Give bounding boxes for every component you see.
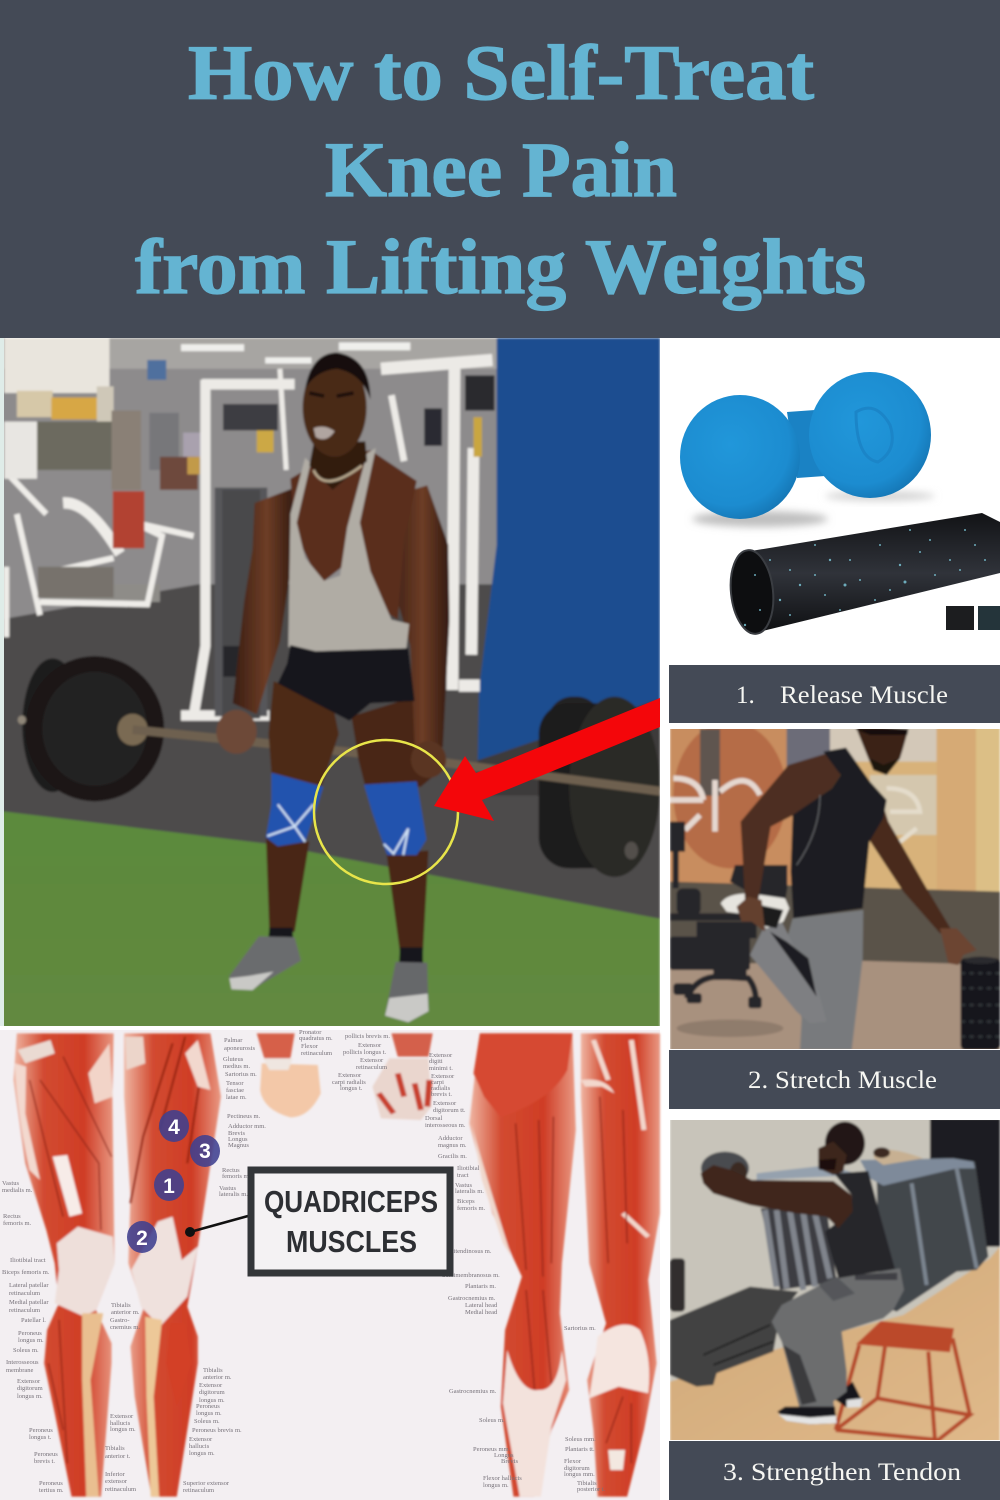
chest — [290, 450, 417, 620]
anatomical labels: interosseous m. — [425, 1122, 466, 1129]
numbered marker 3: 3 — [199, 1140, 211, 1163]
anatomical labels: brevis t. — [34, 1458, 55, 1465]
floor mat — [670, 1287, 798, 1387]
shorts — [278, 645, 415, 721]
anatomical labels: retinaculum — [105, 1486, 136, 1493]
icon: blue peanut massage ball — [680, 372, 935, 527]
anatomical labels: longus m. — [189, 1450, 215, 1457]
anatomical labels: tract — [457, 1172, 469, 1179]
anatomical labels: anterior m. — [111, 1309, 140, 1316]
callout: quadriceps muscles: MUSCLES — [286, 1224, 417, 1259]
shins — [266, 837, 309, 932]
anatomical labels: Lateral patellar — [9, 1282, 49, 1289]
anatomical labels: hallucis — [189, 1443, 210, 1450]
anatomical labels: Iliotibial — [457, 1165, 480, 1172]
numbered marker 4 — [159, 1110, 189, 1142]
anatomical labels: Biceps — [457, 1198, 475, 1205]
anatomical labels: cnemius m. — [110, 1324, 140, 1331]
left gym equipment — [6, 474, 194, 637]
anatomical labels: carpi — [431, 1079, 444, 1086]
anatomical labels: Gastro- — [110, 1317, 130, 1324]
anatomical labels: Plantaris tt. — [565, 1446, 595, 1453]
back leg left — [469, 1033, 576, 1497]
anatomical labels: digiti — [429, 1058, 443, 1065]
anatomical labels: Adductor mm. — [228, 1123, 266, 1130]
numbered marker 3 — [190, 1135, 220, 1167]
anatomical labels: Brevis — [501, 1458, 518, 1465]
anatomical labels: retinaculum — [183, 1487, 214, 1494]
arm — [701, 1165, 853, 1228]
anatomical labels: Medial patellar — [9, 1299, 49, 1306]
callout: quadriceps muscles — [251, 1170, 450, 1273]
anatomical labels: Tibialis — [203, 1367, 223, 1374]
anatomical labels: Lateral head — [465, 1302, 498, 1309]
title — [135, 29, 866, 310]
front leg with numbered muscles — [124, 1033, 221, 1497]
pants — [772, 1268, 904, 1410]
socks — [268, 928, 293, 945]
anatomical labels: Peroneus mm. — [473, 1446, 511, 1453]
anatomical labels: Magnus — [228, 1142, 249, 1149]
anatomical labels: Rectus — [3, 1213, 21, 1220]
far shoe — [833, 1382, 863, 1408]
anatomical labels: hallucis — [110, 1420, 131, 1427]
anatomical labels: longus m. — [17, 1393, 43, 1400]
grey tank top — [288, 448, 409, 652]
anatomical labels: Tibialis — [577, 1480, 597, 1487]
foam roller — [961, 957, 1000, 1050]
anatomical labels: lateralis m. — [219, 1191, 248, 1198]
anatomical labels: Extensor — [110, 1413, 134, 1420]
anatomical labels: Pronator — [299, 1029, 322, 1036]
label: strengthen tendon — [669, 1441, 1000, 1500]
anatomical labels: Rectus — [222, 1167, 240, 1174]
bent leg — [750, 922, 827, 1023]
label: release muscle: Release Muscle — [780, 682, 948, 709]
barbell — [133, 730, 660, 791]
anatomical labels — [2, 1029, 606, 1494]
left edge strip — [0, 338, 4, 1026]
weight stack frame — [181, 360, 492, 716]
panel: anatomy chart of leg muscles — [0, 1029, 660, 1500]
turf — [0, 811, 660, 1028]
anatomical labels: Pectineus m. — [227, 1113, 261, 1120]
numbered marker 1 — [154, 1169, 184, 1201]
anatomical labels: Plantaris m. — [465, 1283, 496, 1290]
hand — [737, 897, 765, 932]
head — [855, 725, 908, 775]
photo: box squat with medicine ball — [670, 1115, 1000, 1445]
label: stretch muscle: 2. Stretch Muscle — [748, 1067, 937, 1094]
floor — [0, 584, 660, 919]
anatomical labels: Flexor hallucis — [483, 1475, 522, 1482]
anatomical labels: Peroneus — [34, 1451, 58, 1458]
anatomical labels: retinaculum — [9, 1290, 40, 1297]
anatomical labels: posterior t. — [577, 1486, 606, 1493]
anatomical labels: Tensor — [226, 1080, 244, 1087]
label: release muscle — [669, 665, 1000, 723]
thighs — [269, 681, 339, 791]
anatomical labels: Palmar — [224, 1037, 243, 1044]
anatomical labels: longus m. — [483, 1482, 509, 1489]
anatomical labels: Gastrocnemius m. — [449, 1388, 497, 1395]
anatomical labels: Peroneus — [18, 1330, 42, 1337]
anatomical labels: Soleus m. — [479, 1417, 505, 1424]
callout: quadriceps muscles: QUADRICEPS — [264, 1184, 438, 1219]
man squatting — [701, 1122, 904, 1424]
anatomical labels: tertius m. — [39, 1487, 64, 1494]
neck — [309, 441, 367, 490]
shoes — [229, 936, 301, 989]
anatomical labels: digitorum — [17, 1385, 43, 1392]
anatomical labels: longus m. — [196, 1410, 222, 1417]
numbered marker 1: 1 — [163, 1175, 175, 1198]
anatomical labels: Sartorius m. — [225, 1071, 257, 1078]
anatomical labels: Tibialis — [111, 1302, 131, 1309]
label: release muscle: 1. — [736, 682, 755, 709]
anatomical labels: retinaculum — [301, 1050, 332, 1057]
anatomical labels: Inferior — [105, 1471, 126, 1478]
anatomical labels: Peroneus brevis m. — [192, 1427, 242, 1434]
numbered marker 2 — [127, 1221, 157, 1253]
title: from Lifting Weights — [135, 223, 866, 310]
tank top — [825, 1171, 895, 1278]
anatomical labels: Extensor — [189, 1436, 213, 1443]
front arm — [869, 795, 952, 933]
anatomical labels: quadratus m. — [299, 1035, 333, 1042]
anatomical labels: longus m. — [199, 1397, 225, 1404]
anatomical labels: brevis t. — [431, 1091, 452, 1098]
callout pointer — [185, 1216, 248, 1237]
anatomical labels: Patellar l. — [21, 1317, 46, 1324]
anatomical labels: magnus m. — [438, 1142, 467, 1149]
anatomical labels: Extensor — [431, 1073, 455, 1080]
fist — [257, 1033, 321, 1117]
anatomical labels: longus mm. — [564, 1471, 595, 1478]
head — [825, 1122, 865, 1165]
head — [303, 358, 367, 457]
title: Knee Pain — [325, 126, 677, 213]
anatomical labels: Semimembranosus m. — [442, 1272, 500, 1279]
title: How to Self-Treat — [188, 29, 814, 116]
header panel — [0, 0, 1000, 338]
anatomical labels: pollicis brevis m. — [345, 1033, 390, 1040]
anatomical labels: Vastus — [2, 1180, 19, 1187]
anatomical labels: digitorum tt. — [433, 1107, 466, 1114]
anatomical labels: pollicis longus t. — [343, 1049, 387, 1056]
anatomical labels: Peroneus — [29, 1427, 53, 1434]
shoe — [721, 893, 789, 928]
anatomical labels: digitorum — [199, 1389, 225, 1396]
anatomical labels: femoris m. — [457, 1205, 486, 1212]
anatomical labels: Interosseous — [6, 1359, 39, 1366]
anatomical labels: medialis m. — [2, 1187, 33, 1194]
anatomical labels: Superior extensor — [183, 1480, 230, 1487]
anatomical labels: retinaculum — [356, 1064, 387, 1071]
anatomical labels: Flexor — [301, 1043, 319, 1050]
black tank top — [791, 748, 887, 918]
anatomical labels: Flexor — [564, 1458, 582, 1465]
anatomical labels: carpi radialis — [332, 1079, 366, 1086]
anatomical labels: Vastus — [455, 1182, 472, 1189]
red arrow — [434, 698, 660, 821]
anatomical labels: Tibialis — [105, 1445, 125, 1452]
anatomical labels: Medial head — [465, 1309, 498, 1316]
anatomical labels: Peroneus — [196, 1403, 220, 1410]
anatomical labels: Longus — [494, 1452, 514, 1459]
icon: black foam roller — [727, 513, 1000, 636]
back leg right — [581, 1033, 660, 1497]
standing leg — [783, 910, 863, 1050]
icon: roller colour swatches — [946, 606, 1000, 630]
anatomical labels: Extensor — [17, 1378, 41, 1385]
yellow circle highlight — [314, 740, 458, 884]
anatomical labels: femoris m. — [3, 1220, 32, 1227]
bench equipment — [670, 822, 787, 1008]
anatomical labels: Gracilis m. — [438, 1153, 467, 1160]
numbered marker 2: 2 — [136, 1227, 148, 1250]
medicine ball — [701, 1152, 749, 1185]
anatomical labels: Semitendinosus m. — [442, 1248, 492, 1255]
near shoe — [777, 1407, 837, 1424]
anatomical labels: Extensor — [338, 1072, 362, 1079]
man stretching — [721, 725, 977, 1050]
anatomical labels: latae m. — [226, 1094, 247, 1101]
anatomical labels: Gluteus — [223, 1056, 244, 1063]
anatomical labels: Gastrocnemius m. — [448, 1295, 496, 1302]
anatomical labels: aponeurosis — [224, 1045, 256, 1052]
anatomical labels: longus t. — [29, 1434, 52, 1441]
grey pad stack — [877, 1160, 988, 1312]
anatomical labels: Extensor — [433, 1100, 457, 1107]
lifter — [216, 353, 450, 1022]
label: stretch muscle — [669, 1050, 1000, 1109]
anatomical labels: femoris m. — [222, 1173, 251, 1180]
anatomical labels: Iliotibial tract — [10, 1257, 46, 1264]
anatomical labels: medius m. — [223, 1063, 250, 1070]
panel: release muscle tools — [664, 338, 1000, 665]
anatomical labels: Dorsal — [425, 1115, 443, 1122]
anatomical labels: longus m. — [18, 1337, 44, 1344]
anatomical labels: Vastus — [219, 1185, 236, 1192]
photo: deadlift with knee pain highlighted — [0, 338, 660, 1028]
anatomical labels: digitorum — [564, 1465, 590, 1472]
anatomical labels: Peroneus — [39, 1480, 63, 1487]
floor — [670, 882, 1000, 965]
anatomical labels: minimi t. — [429, 1065, 453, 1072]
anatomical labels: Soleus m. — [194, 1418, 220, 1425]
anatomical labels: longus m. — [110, 1426, 136, 1433]
anatomical labels: lateralis m. — [455, 1188, 484, 1195]
anatomical labels: Sartorius m. — [564, 1325, 596, 1332]
anatomical labels: Soleus mm. — [565, 1436, 596, 1443]
anatomical labels: Adductor — [438, 1135, 463, 1142]
anatomical labels: retinaculum — [9, 1307, 40, 1314]
anatomical labels: Extensor — [358, 1042, 382, 1049]
label: strengthen tendon: 3. Strengthen Tendon — [723, 1459, 962, 1486]
hand muscles — [372, 1033, 433, 1120]
anatomical labels: anterior t. — [105, 1453, 131, 1460]
photo: quad stretch — [670, 722, 1000, 1055]
blue wall — [478, 338, 660, 760]
anatomical labels: membrane — [6, 1367, 34, 1374]
front leg left — [13, 1033, 114, 1497]
anatomical labels: Biceps femoris m. — [2, 1269, 50, 1276]
anatomical labels: radialis — [431, 1085, 451, 1092]
anatomical labels: Brevis — [228, 1130, 245, 1137]
anatomical labels: Extensor — [429, 1052, 453, 1059]
red plyo box — [836, 1338, 970, 1440]
knee sleeves — [266, 773, 323, 846]
mural letters — [670, 778, 760, 832]
numbered marker 4: 4 — [168, 1116, 180, 1139]
right weight plates — [539, 697, 660, 877]
back arm — [741, 753, 841, 900]
left weight plates — [18, 656, 164, 801]
anatomical labels: Extensor — [199, 1382, 223, 1389]
dumbbells — [670, 1258, 685, 1312]
anatomical labels: Longus — [228, 1136, 248, 1143]
anatomical labels: fasciae — [226, 1087, 244, 1094]
anatomical labels: Extensor — [360, 1057, 384, 1064]
anatomical labels: anterior m. — [203, 1374, 232, 1381]
arms — [233, 488, 295, 714]
anatomical labels: Soleus m. — [13, 1347, 39, 1354]
anatomical labels: longus t. — [340, 1085, 363, 1092]
anatomical labels: extensor — [105, 1478, 128, 1485]
